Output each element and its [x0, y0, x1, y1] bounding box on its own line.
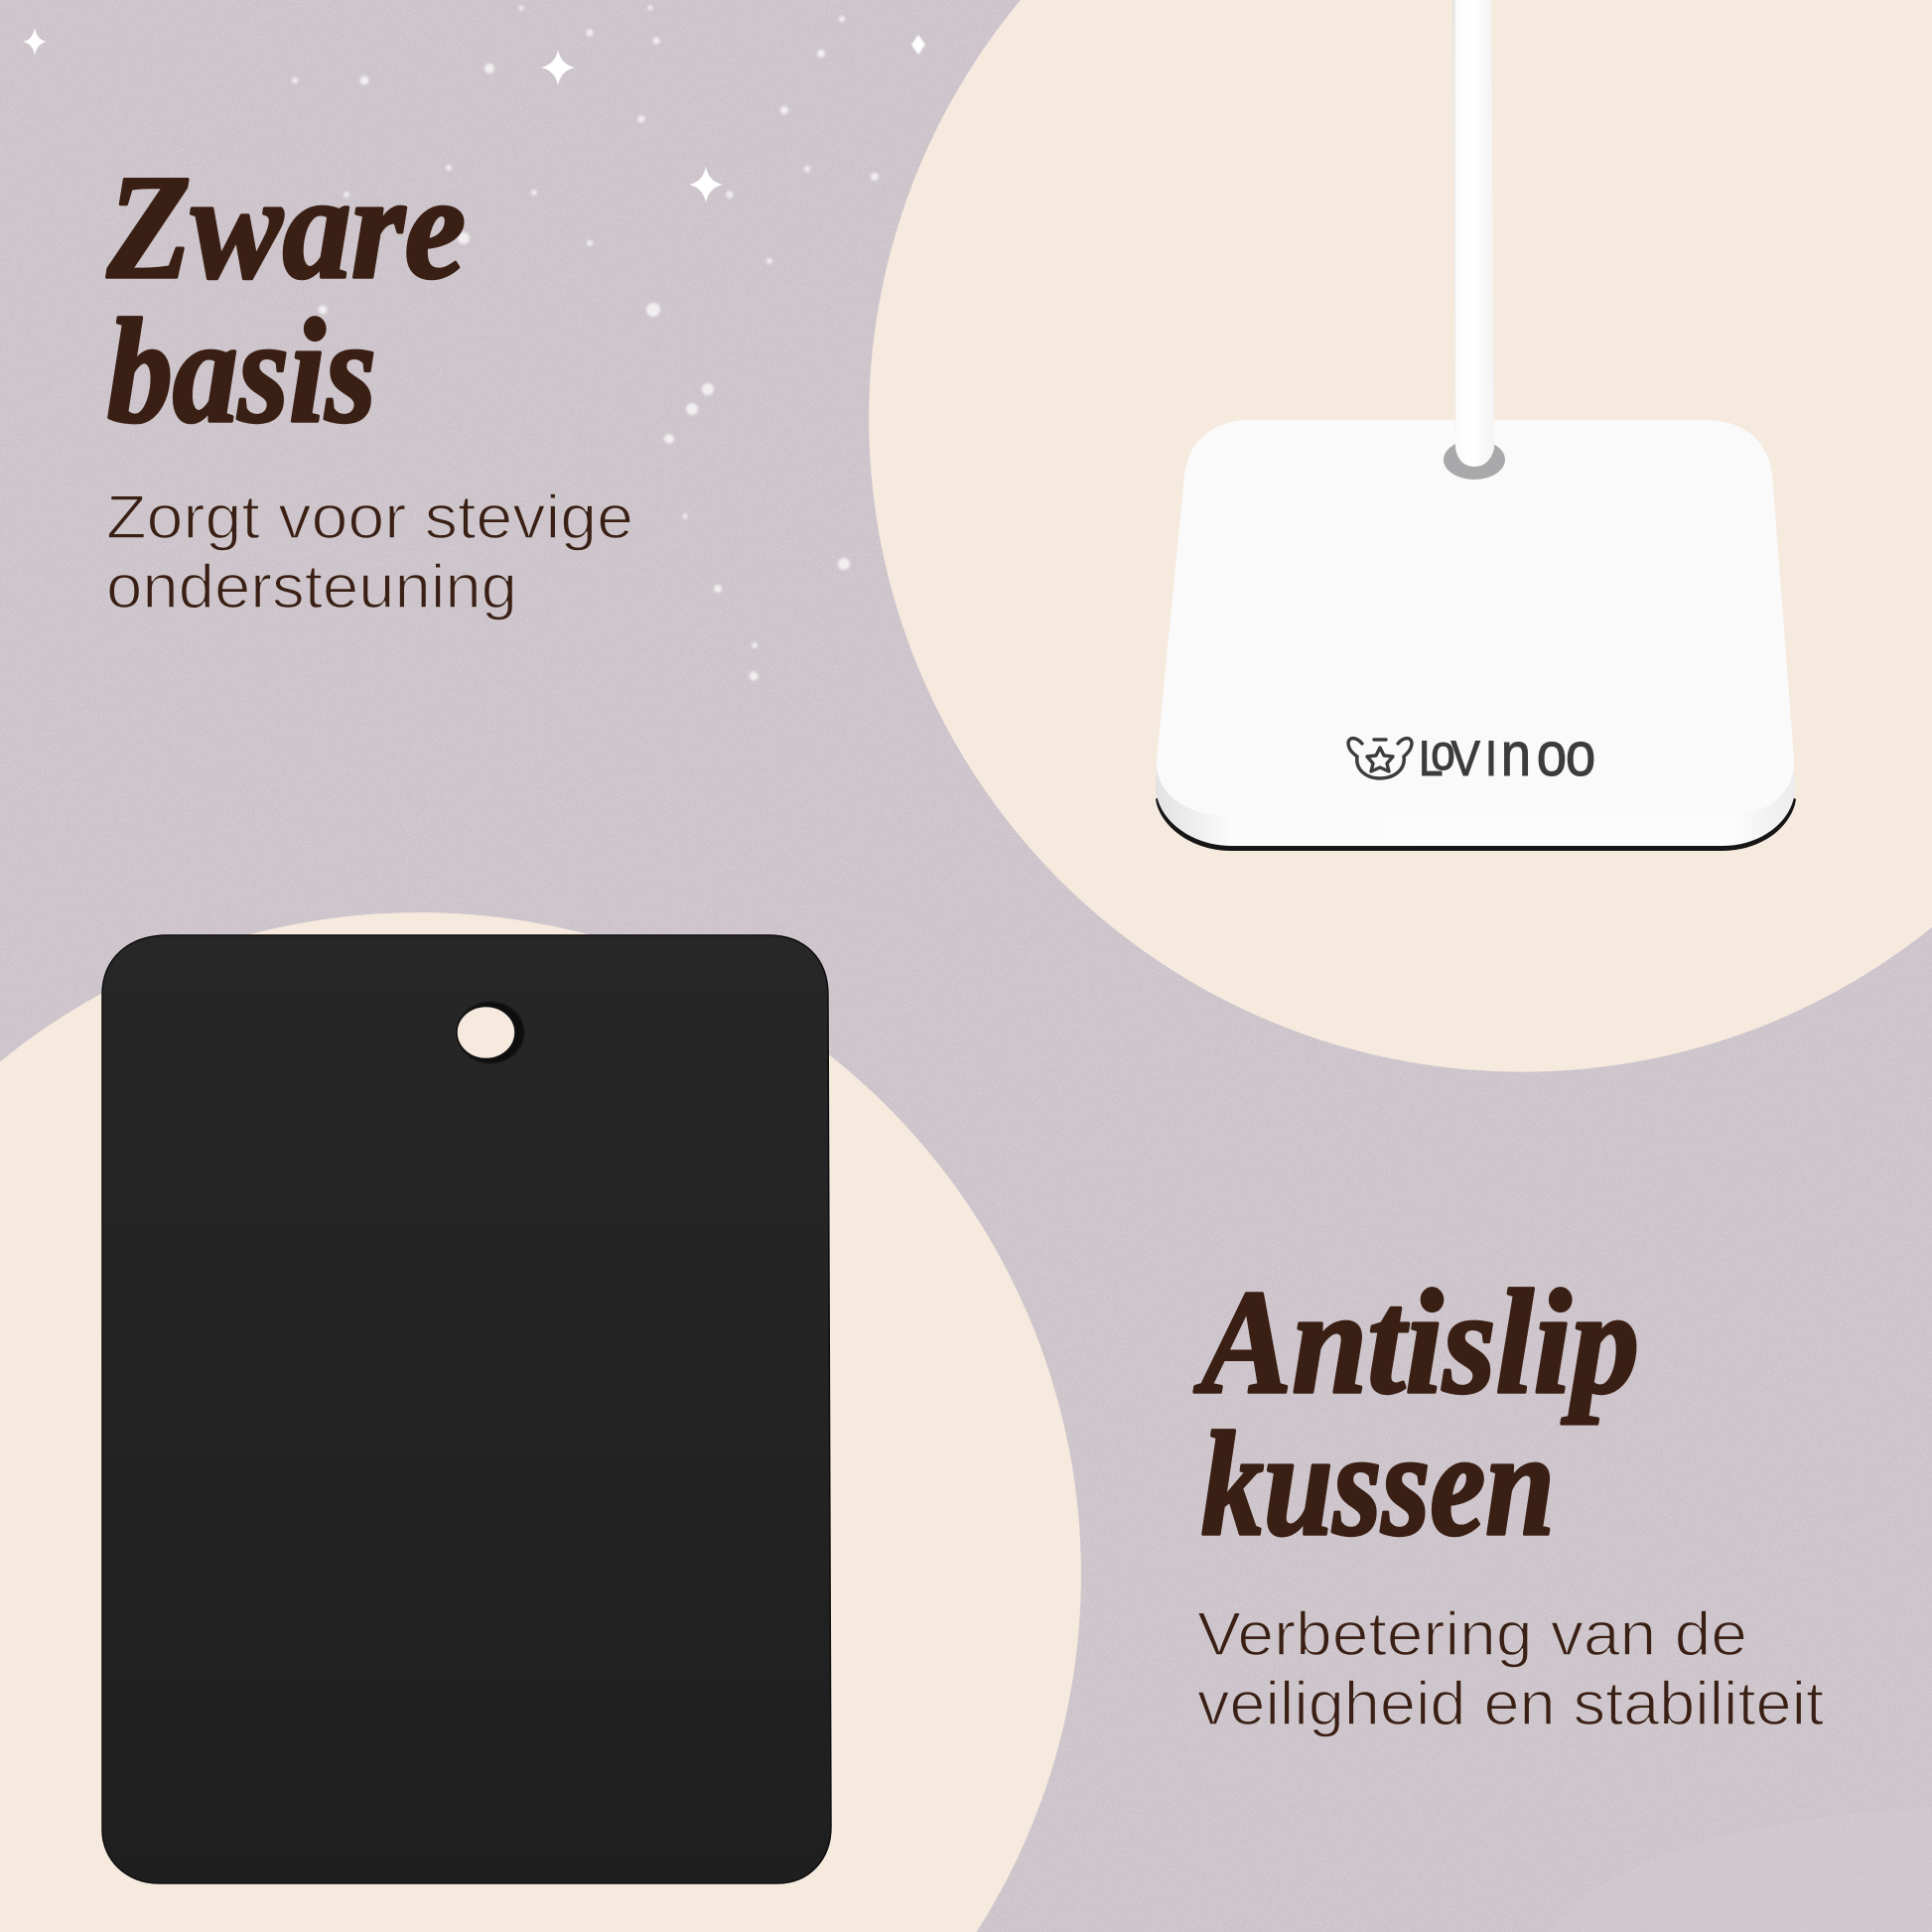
black underside of base: [1156, 794, 1796, 851]
grey ring collar: [1444, 440, 1505, 480]
heading: Antislip kussen: kussen: [1201, 1402, 1555, 1567]
logo icon: bear with star: [1348, 739, 1412, 778]
pad shape with hole: [102, 935, 831, 1883]
white pole: [1452, 0, 1494, 467]
text block: Zorgt voor stevige ondersteuning: [106, 483, 633, 621]
logo wordmark: n: [1501, 721, 1531, 789]
logo wordmark: I: [1485, 730, 1497, 786]
text block: Zorgt voor stevige ondersteuning: Zorgt voor stevige: [106, 483, 633, 552]
logo wordmark: V: [1451, 730, 1480, 786]
logo wordmark: o: [1537, 721, 1567, 789]
heading: Antislip kussen: [1194, 1260, 1639, 1567]
white base lip: [1156, 420, 1795, 846]
heading: Zware basis: basis: [107, 289, 376, 454]
text block: Zorgt voor stevige ondersteuning: ondersteuning: [106, 553, 517, 621]
panel: cream circle bottom left: [0, 912, 1081, 1932]
top face of base: [1157, 420, 1794, 816]
text block: Verbetering van de veiligheid en stabiliteit: Verbetering van de: [1197, 1600, 1747, 1669]
heading: Zware basis: Zware: [106, 145, 466, 310]
logo wordmark: o: [1566, 721, 1595, 789]
heading: Zware basis: [106, 145, 466, 454]
product: heavy white lamp base: [1156, 0, 1796, 851]
logo wordmark: L: [1419, 730, 1443, 786]
logo: Lovinoo: [1348, 721, 1595, 789]
panel: cream circle top right: [869, 0, 1932, 1072]
text block: Verbetering van de veiligheid en stabiliteit: [1197, 1600, 1824, 1738]
text block: Verbetering van de veiligheid en stabiliteit: veiligheid en stabiliteit: [1197, 1670, 1824, 1738]
hole shadow: [457, 1002, 524, 1063]
heading: Antislip kussen: Antislip: [1194, 1260, 1639, 1425]
logo wordmark: o: [1431, 724, 1455, 780]
product: black anti-slip pad: [102, 935, 831, 1883]
decorative stars and specks: [23, 6, 925, 681]
